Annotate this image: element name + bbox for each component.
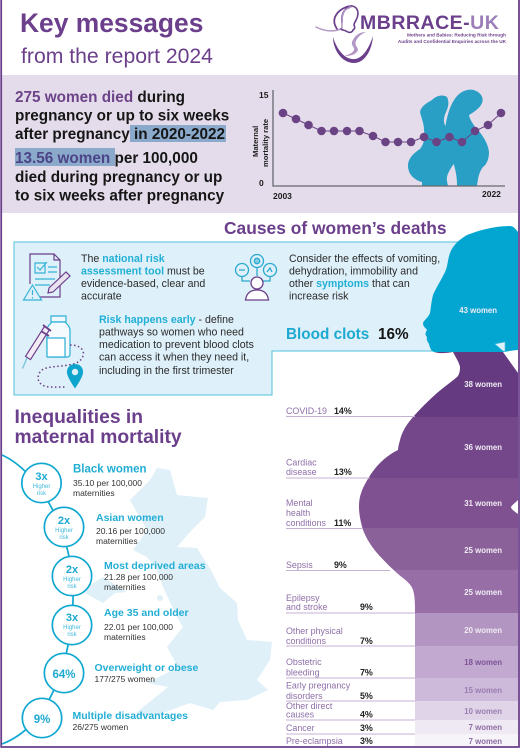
inequality: Black women: Higher (33, 484, 50, 490)
segment labels: number of women: 20 women (464, 626, 502, 635)
text: national risk assessment tool: The (81, 253, 102, 265)
text: 13.56 women: 13.56 women (15, 150, 110, 167)
cause: Pre-eclampsia: 3% (360, 736, 373, 746)
text: national risk assessment tool: assessment tool (81, 266, 164, 278)
cause: Cancer: Cancer (286, 723, 315, 733)
inequality: Asian women (44, 507, 165, 547)
heading: inequalities in maternal mortality: maternal mortality (14, 427, 182, 448)
inequality: Black women (22, 463, 146, 503)
cause: Mental health conditions: health (286, 508, 310, 518)
inequality: Overweight or obese: 177/275 women (94, 674, 155, 684)
cause: Blood clots (286, 326, 409, 343)
axis labels: 2003 (273, 191, 292, 201)
cause: Cardiac disease: Cardiac (286, 458, 317, 468)
heading: inequalities in maternal mortality: Inequalities in (14, 407, 143, 428)
inequality: Asian women: maternities (96, 536, 138, 546)
cause: Other direct causes: causes (286, 710, 315, 720)
text: 275 women died: during (133, 89, 185, 106)
inequality: Asian women: 2x (58, 515, 71, 527)
cause: Pre-eclampsia (286, 736, 373, 746)
inequality: Black women: Black women (73, 464, 146, 476)
inequality: Multiple disadvantages (22, 698, 188, 738)
cause: Cardiac disease: 13% (334, 467, 352, 477)
connector arc (2, 455, 73, 744)
logo tagline: Mothers and Babies: Reducing Risk through (407, 32, 506, 38)
inequality: Age 35 and older: Higher (63, 625, 81, 631)
inequality: Asian women: Higher (55, 528, 73, 534)
cause: Mental health conditions: Mental (286, 498, 313, 508)
cause: Obstetric bleeding (286, 657, 415, 678)
cause: Early pregnancy disorders: disorders (286, 691, 323, 701)
cause: Blood clots: 16% (378, 326, 409, 343)
cause: Epilepsy and stroke: Epilepsy (286, 593, 320, 603)
axes (273, 90, 505, 186)
heading: causes of women's deaths: Causes of women’s deaths (224, 218, 447, 238)
text: consider symptoms: dehydration, immobility and (289, 266, 418, 278)
cause: Cancer: 3% (360, 723, 373, 733)
inequality: Overweight or obese: 64% (52, 669, 76, 681)
inequality: Asian women: 20.16 per 100,000 (96, 526, 165, 536)
cause: Other direct causes: 4% (360, 710, 373, 720)
text: 13.56 women: died during pregnancy or up (15, 169, 222, 186)
logo: MBRRACE-UK (316, 6, 507, 63)
chart: maternal mortality rate (251, 90, 505, 201)
text: risk happens early: can access it when they need it, (99, 352, 249, 364)
inequality: Most deprived areas: 21.28 per 100,000 (104, 572, 173, 582)
cause rows: label, percentage and rule (286, 406, 415, 746)
text: consider symptoms: other (289, 278, 316, 290)
header band: lavender summary panel (2, 75, 518, 213)
cause: Obstetric bleeding: bleeding (286, 668, 320, 678)
cause: Epilepsy and stroke: 9% (360, 602, 373, 612)
title: Key messages (20, 8, 203, 38)
inequality: Age 35 and older: maternities (104, 632, 146, 642)
subtitle: from the report 2024 (21, 45, 213, 68)
text: consider symptoms: increase risk (289, 290, 349, 302)
panel: recommendations (14, 242, 506, 395)
text: risk happens early: pathways so women who need (99, 326, 244, 338)
segment labels: number of women: 36 women (464, 443, 502, 452)
cause: Other physical conditions: Other physical (286, 626, 343, 636)
inequality: Overweight or obese: Overweight or obese (94, 662, 199, 674)
cause: Early pregnancy disorders: Early pregnancy (286, 680, 351, 690)
cause: Other direct causes (286, 701, 415, 720)
text: risk happens early: - define (196, 314, 234, 326)
cause: Obstetric bleeding: Obstetric (286, 657, 322, 667)
line and data points (279, 109, 505, 146)
text: risk happens early: medication to prevent blood clots (99, 339, 254, 351)
inequality: Asian women: risk (59, 535, 70, 541)
text: risk happens early: Risk happens early (99, 314, 196, 326)
text: national risk assessment tool: must be (164, 266, 205, 278)
segment labels: number of women: 25 women (464, 546, 502, 555)
highlight: in 2020-2022 (130, 125, 226, 142)
segment labels: number of women: 31 women (464, 499, 502, 508)
inequality: Black women: risk (37, 491, 47, 497)
logo tagline: Audits and Confidential Enquiries across the UK (398, 39, 507, 44)
map: UK silhouette (85, 468, 272, 717)
inequality: Multiple disadvantages: 26/275 women (72, 722, 129, 732)
axis labels: 0 (259, 178, 264, 188)
cause: Obstetric bleeding: 7% (360, 668, 373, 678)
logo wordmark: MBRRACE-UK (360, 12, 499, 34)
inequality: Black women: 35.10 per 100,000 (73, 478, 142, 488)
highlight: 13.56 women (15, 148, 115, 166)
axis labels (251, 90, 501, 201)
text: national risk assessment tool: accurate (81, 290, 122, 302)
segment labels: number of women: 38 women (464, 380, 502, 389)
text: national risk assessment tool: evidence-based, clear and (81, 278, 205, 290)
segment labels: number of women: 10 women (464, 707, 502, 716)
inequality: Multiple disadvantages: 9% (34, 714, 50, 726)
axis labels: Maternal (251, 126, 260, 157)
cause: Other direct causes: Other direct (286, 701, 333, 711)
inequality: Multiple disadvantages: Multiple disadvantages (72, 710, 188, 722)
text: consider symptoms: Consider the effects of vomiting, (289, 253, 440, 265)
cause: Cardiac disease (286, 458, 370, 478)
inequality: Most deprived areas: risk (67, 584, 78, 590)
cause: Early pregnancy disorders (286, 680, 415, 701)
cause: Sepsis: 9% (334, 560, 347, 570)
cause: Cancer (286, 723, 415, 734)
cause: Mental health conditions (286, 498, 362, 528)
text: 275 women died: pregnancy or up to six weeks (15, 108, 229, 124)
axis labels: 2022 (482, 189, 501, 199)
cause: Blood clots: Blood clots (286, 326, 369, 343)
logo: mother and baby outline mark (316, 6, 373, 63)
segment labels: number of women (459, 306, 502, 746)
cause: Pre-eclampsia: Pre-eclampsia (286, 736, 343, 746)
text: risk happens early: including in the first trimester (99, 365, 234, 377)
segment labels: number of women: 18 women (464, 658, 502, 667)
inequality: Age 35 and older: 3x (66, 612, 79, 624)
inequality: Most deprived areas: 2x (66, 564, 79, 576)
cause: COVID-19 (286, 406, 415, 416)
icon: risk assessment document (24, 254, 70, 300)
box corner visible beside the neck (495, 342, 505, 351)
inequality: Age 35 and older: 22.01 per 100,000 (104, 622, 173, 632)
cause: Cardiac disease: disease (286, 467, 317, 477)
inequality: Age 35 and older: risk (67, 632, 78, 638)
inequality: Asian women: Asian women (96, 512, 164, 524)
inequality: Most deprived areas: Most deprived areas (104, 560, 206, 572)
text: 13.56 women: to six weeks after pregnancy (15, 188, 225, 204)
text: 275 women died: 275 women died (15, 89, 133, 106)
segment labels: number of women: 43 women (459, 306, 497, 315)
cause: COVID-19: 14% (334, 406, 352, 416)
cause: COVID-19: COVID-19 (286, 406, 327, 416)
chart: pregnant silhouette segmented by cause (359, 226, 518, 746)
cause: Other physical conditions: conditions (286, 636, 327, 646)
cause: Sepsis (286, 560, 390, 570)
inequality: Age 35 and older (52, 605, 189, 645)
segment labels: number of women: 15 women (464, 686, 502, 695)
icon: person with symptoms (236, 254, 276, 300)
axis labels: mortality rate (261, 119, 270, 167)
inequality: Overweight or obese (44, 653, 199, 693)
icon: two pregnant women silhouettes (408, 90, 489, 186)
text: consider symptoms: symptoms that can (316, 278, 410, 290)
text: national risk assessment tool: national risk (102, 253, 165, 265)
segment labels: number of women: 25 women (464, 588, 502, 597)
inequality: Most deprived areas (52, 556, 206, 596)
text: 13.56 women: per 100,000 (110, 150, 198, 167)
cause: Mental health conditions: 11% (334, 518, 351, 528)
cause: Other physical conditions: 7% (360, 636, 373, 646)
cause: Other physical conditions (286, 626, 415, 646)
cause: Early pregnancy disorders: 5% (360, 691, 373, 701)
inequality: Age 35 and older: Age 35 and older (104, 607, 189, 619)
cause: Mental health conditions: conditions (286, 518, 327, 528)
segment labels: number of women: 7 women (469, 737, 502, 746)
inequality: Most deprived areas: Higher (63, 577, 81, 583)
icon: syringe, vial and pathway pin (22, 316, 83, 388)
cause: Sepsis: Sepsis (286, 560, 313, 570)
axis labels: 15 (259, 90, 269, 100)
segment labels: number of women: 7 women (469, 723, 502, 732)
cause: Epilepsy and stroke (286, 593, 415, 613)
inequality: Black women: maternities (73, 488, 115, 498)
text: 275 women died: after pregnancy in 2020-2022 (15, 126, 225, 143)
inequality: Most deprived areas: maternities (104, 582, 146, 592)
cause: Epilepsy and stroke: and stroke (286, 602, 328, 612)
inequality: Black women: 3x (35, 471, 48, 483)
